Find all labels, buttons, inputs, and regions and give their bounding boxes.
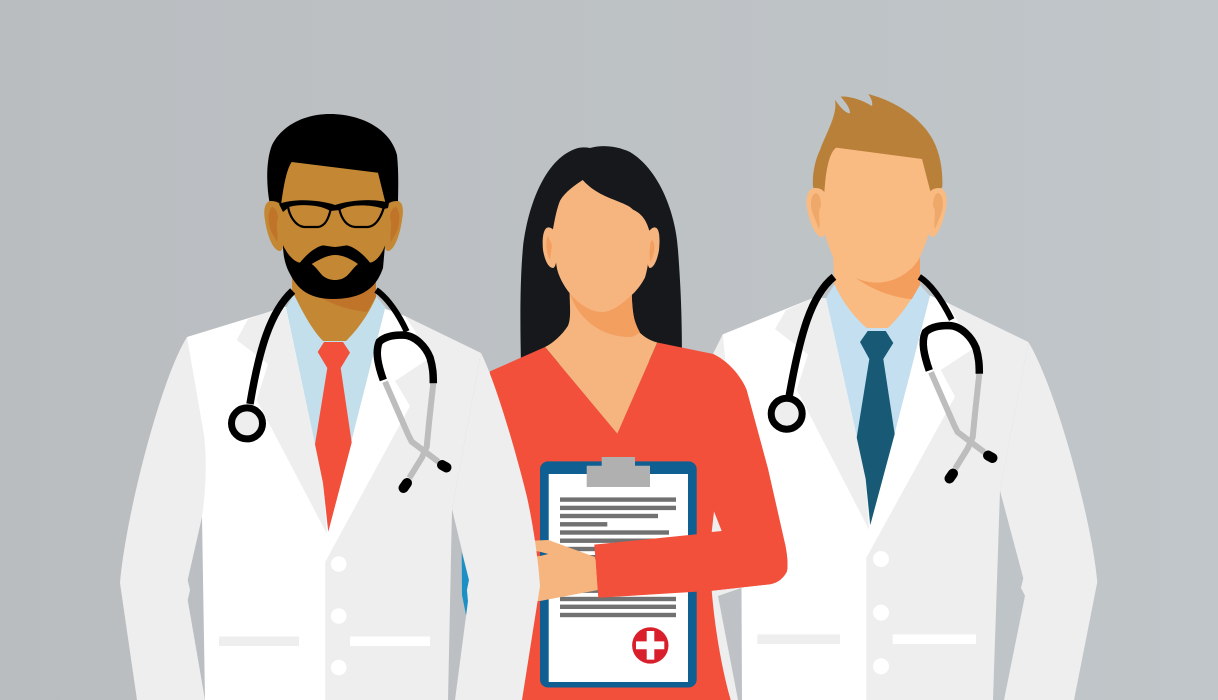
left doctor pockets	[219, 636, 430, 646]
left doctor stethoscope	[232, 290, 446, 488]
woman face	[553, 180, 651, 312]
left doctor buttons	[331, 556, 347, 675]
right doctor right lapel	[867, 296, 973, 557]
clipboard board	[540, 461, 697, 688]
left doctor left sleeve	[120, 337, 206, 700]
right doctor ears	[806, 188, 947, 237]
left doctor right lapel	[326, 309, 427, 561]
gap under woman's arm	[712, 511, 722, 532]
right doctor coat grey panel	[867, 303, 1028, 700]
right doctor right sleeve	[1000, 342, 1097, 700]
right doctor far sleeve	[690, 334, 741, 700]
woman red top	[470, 342, 788, 700]
right doctor neck shadow	[833, 250, 920, 299]
woman hair	[520, 146, 682, 365]
left doctor left lapel	[237, 308, 327, 534]
left doctor neck shadow	[322, 283, 376, 312]
right doctor left lapel	[775, 298, 869, 530]
right doctor shirt	[826, 285, 930, 526]
figure: woman in red scrubs	[462, 146, 788, 700]
right doctor hair	[813, 94, 942, 199]
clipboard text lines	[560, 497, 676, 617]
right doctor face	[823, 148, 932, 283]
figure: left doctor	[120, 114, 540, 700]
left doctor right sleeve	[452, 353, 540, 700]
woman neck shadow	[570, 293, 640, 337]
clipboard	[540, 457, 697, 688]
figure: right doctor	[690, 94, 1097, 700]
left doctor hair	[267, 114, 398, 205]
right doctor neck	[833, 250, 920, 328]
right doctor buttons	[873, 551, 889, 674]
right doctor pockets	[757, 634, 976, 644]
right doctor stethoscope	[771, 277, 992, 478]
left doctor tie	[315, 342, 352, 532]
left doctor ears	[264, 201, 403, 251]
woman ears	[543, 227, 660, 268]
left doctor shirt	[286, 296, 386, 534]
clipboard paper	[549, 474, 688, 682]
woman neck	[545, 290, 657, 434]
woman forearm	[594, 520, 788, 598]
clipboard red cross badge	[632, 627, 668, 664]
left doctor beard	[283, 245, 385, 299]
right doctor tie	[857, 331, 895, 525]
left doctor glasses	[279, 200, 389, 227]
woman hand	[530, 540, 598, 601]
right doctor coat white panel	[723, 298, 880, 700]
woman blue undershirt sliver	[462, 552, 469, 620]
left doctor coat grey panel	[326, 316, 481, 700]
left doctor face	[281, 162, 385, 298]
left doctor neck	[292, 270, 376, 341]
clipboard clip	[587, 457, 650, 487]
left doctor coat white panel	[187, 307, 345, 700]
